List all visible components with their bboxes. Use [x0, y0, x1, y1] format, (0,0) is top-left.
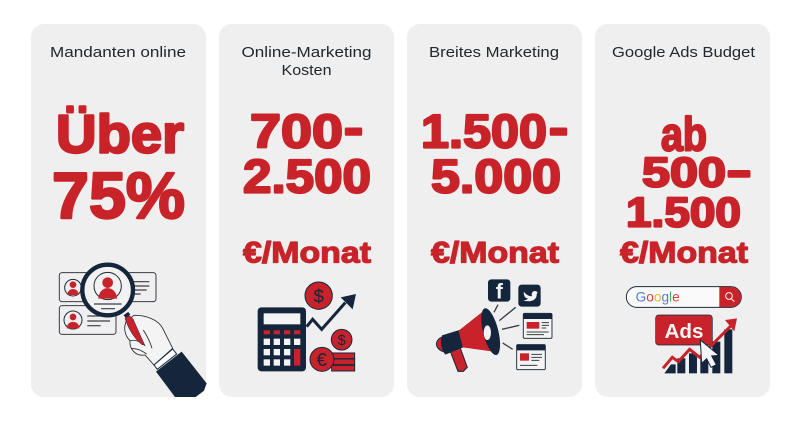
panel: Online-Marketing Kosten: [219, 24, 394, 397]
icon: Google search bar and Ads growth chart: Google: [636, 288, 680, 304]
icon: megaphone with social media and web pages: f: [496, 280, 504, 304]
big number: 700–2.500: 2.500: [243, 150, 371, 202]
unit: €/Monat: €/Monat: [620, 236, 748, 270]
big number: Über 75%: Über: [56, 104, 184, 164]
icon: Google search bar and Ads growth chart: [626, 287, 741, 373]
heading: Online-Marketing Kosten: [242, 44, 372, 79]
big number: 1.500–5.000: [421, 102, 567, 202]
big number: ab 500–1.500: ab: [661, 108, 707, 160]
big number: 1.500–5.000: 1.500: [421, 104, 547, 158]
big number: 1.500–5.000: –: [550, 102, 567, 154]
icon: calculator, coins and rising arrow: €: [316, 349, 327, 370]
big number: 1.500–5.000: 5.000: [431, 150, 561, 202]
panel: Google Ads Budget: [595, 24, 770, 397]
icon: calculator, coins and rising arrow: [258, 282, 356, 371]
heading: Breites Marketing: Breites Marketing: [429, 44, 559, 61]
panel: Breites Marketing: [407, 24, 582, 397]
heading: Online-Marketing Kosten: Online-Marketing: [242, 44, 372, 61]
icon: calculator, coins and rising arrow: $: [313, 285, 324, 306]
big number: ab 500–1.500: –: [728, 147, 750, 194]
big number: Über 75%: [52, 104, 185, 232]
big number: ab 500–1.500: 500: [642, 148, 726, 196]
unit: €/Monat: €/Monat: [243, 236, 371, 270]
big number: ab 500–1.500: 1.500: [626, 188, 741, 236]
big number: 700–2.500: 700: [250, 104, 343, 158]
big number: 700–2.500: –: [345, 102, 362, 154]
icon: megaphone with social media and web pages: [436, 279, 552, 371]
big number: 700–2.500: [243, 102, 371, 202]
heading: Mandanten online: Mandanten online: [50, 44, 186, 61]
big number: ab 500–1.500: [626, 108, 750, 236]
big number: Über 75%: 75%: [52, 159, 185, 232]
icon: calculator, coins and rising arrow: $: [338, 333, 346, 349]
icon: Google search bar and Ads growth chart: Ads: [664, 320, 704, 343]
panel: Mandanten online: [31, 24, 207, 397]
unit: €/Monat: €/Monat: [431, 236, 559, 270]
heading: Google Ads Budget: Google Ads Budget: [612, 44, 756, 61]
heading: Online-Marketing Kosten: Kosten: [282, 62, 332, 79]
icon: magnifier over client profiles: [59, 265, 207, 397]
